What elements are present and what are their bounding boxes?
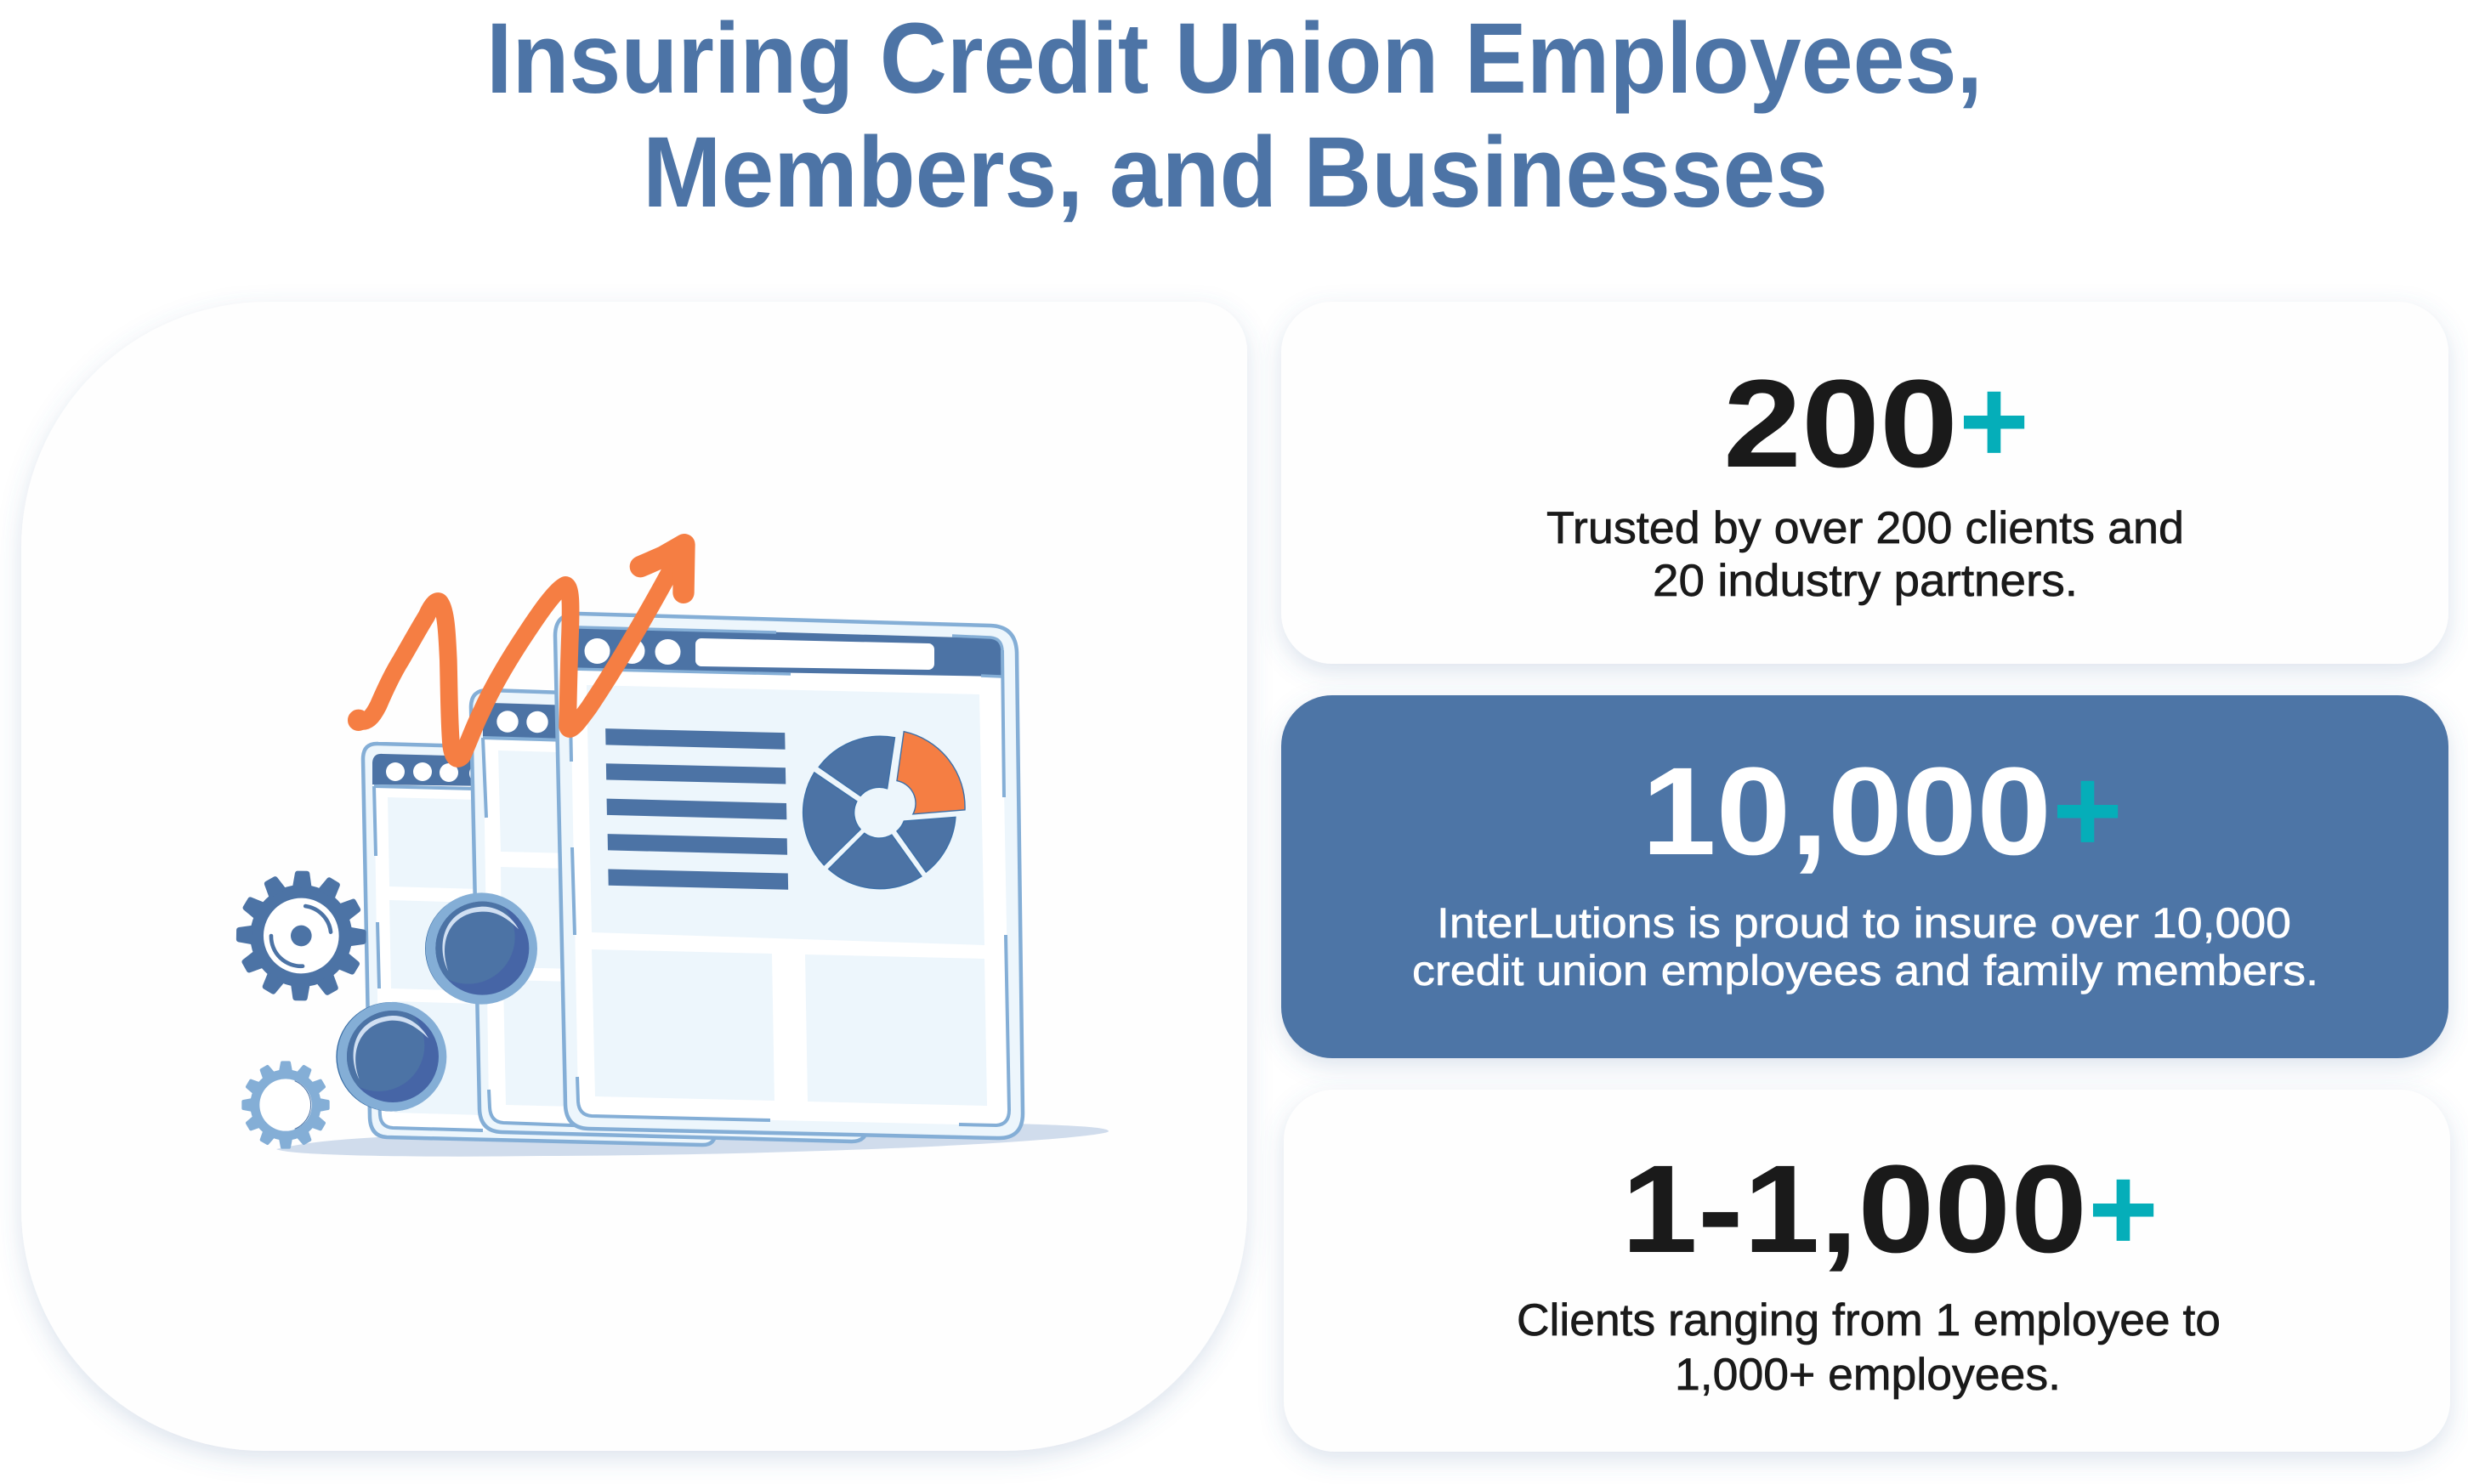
icon: small gear bbox=[241, 1061, 330, 1149]
content panel: top bbox=[587, 685, 984, 945]
icon: large gear bbox=[235, 869, 367, 1002]
description: credit union employees and family members. bbox=[1412, 947, 2318, 994]
stat number: 10,000 bbox=[1642, 742, 2051, 881]
stat number: 200 bbox=[1723, 354, 1958, 494]
browser window: middle bbox=[471, 690, 867, 1141]
icon: upper round button bbox=[422, 891, 537, 1005]
description bbox=[1546, 503, 2184, 606]
content panel: bottom right bbox=[805, 954, 987, 1106]
stat number: 1-1,000 bbox=[1621, 1140, 2087, 1279]
browser header bar bbox=[570, 626, 1001, 677]
description: 1,000+ employees. bbox=[1675, 1350, 2061, 1400]
icon: rising zigzag arrow bbox=[353, 544, 684, 758]
content panel: bottom left bbox=[592, 949, 774, 1101]
description: InterLutions is proud to insure over 10,000 bbox=[1437, 899, 2291, 947]
address bar bbox=[701, 644, 928, 664]
description: Clients ranging from 1 employee to bbox=[1517, 1295, 2221, 1345]
browser window: front bbox=[555, 614, 1023, 1138]
teal plus: + bbox=[2052, 743, 2123, 878]
browser window: left bbox=[363, 744, 716, 1145]
teal plus: + bbox=[2088, 1141, 2159, 1277]
description: 20 industry partners. bbox=[1653, 556, 2078, 606]
title: Insuring Credit Union Employees, bbox=[486, 3, 1983, 115]
panel: 200+ stat bbox=[1281, 302, 2448, 664]
description: Trusted by over 200 clients and bbox=[1546, 503, 2184, 553]
panel: 10,000+ stat bbox=[1281, 695, 2448, 1058]
text lines bbox=[605, 728, 788, 890]
description bbox=[1517, 1295, 2221, 1400]
title bbox=[486, 3, 1983, 229]
ground shadow bbox=[276, 1124, 1109, 1157]
teal plus: + bbox=[1959, 354, 2029, 489]
panel: illustration card bbox=[21, 302, 1247, 1451]
panel: 1-1,000+ stat bbox=[1284, 1090, 2450, 1452]
donut chart bbox=[803, 732, 965, 889]
title: Members, and Businesses bbox=[643, 116, 1828, 229]
icon: lower round button bbox=[332, 1000, 446, 1112]
description bbox=[1412, 899, 2318, 994]
